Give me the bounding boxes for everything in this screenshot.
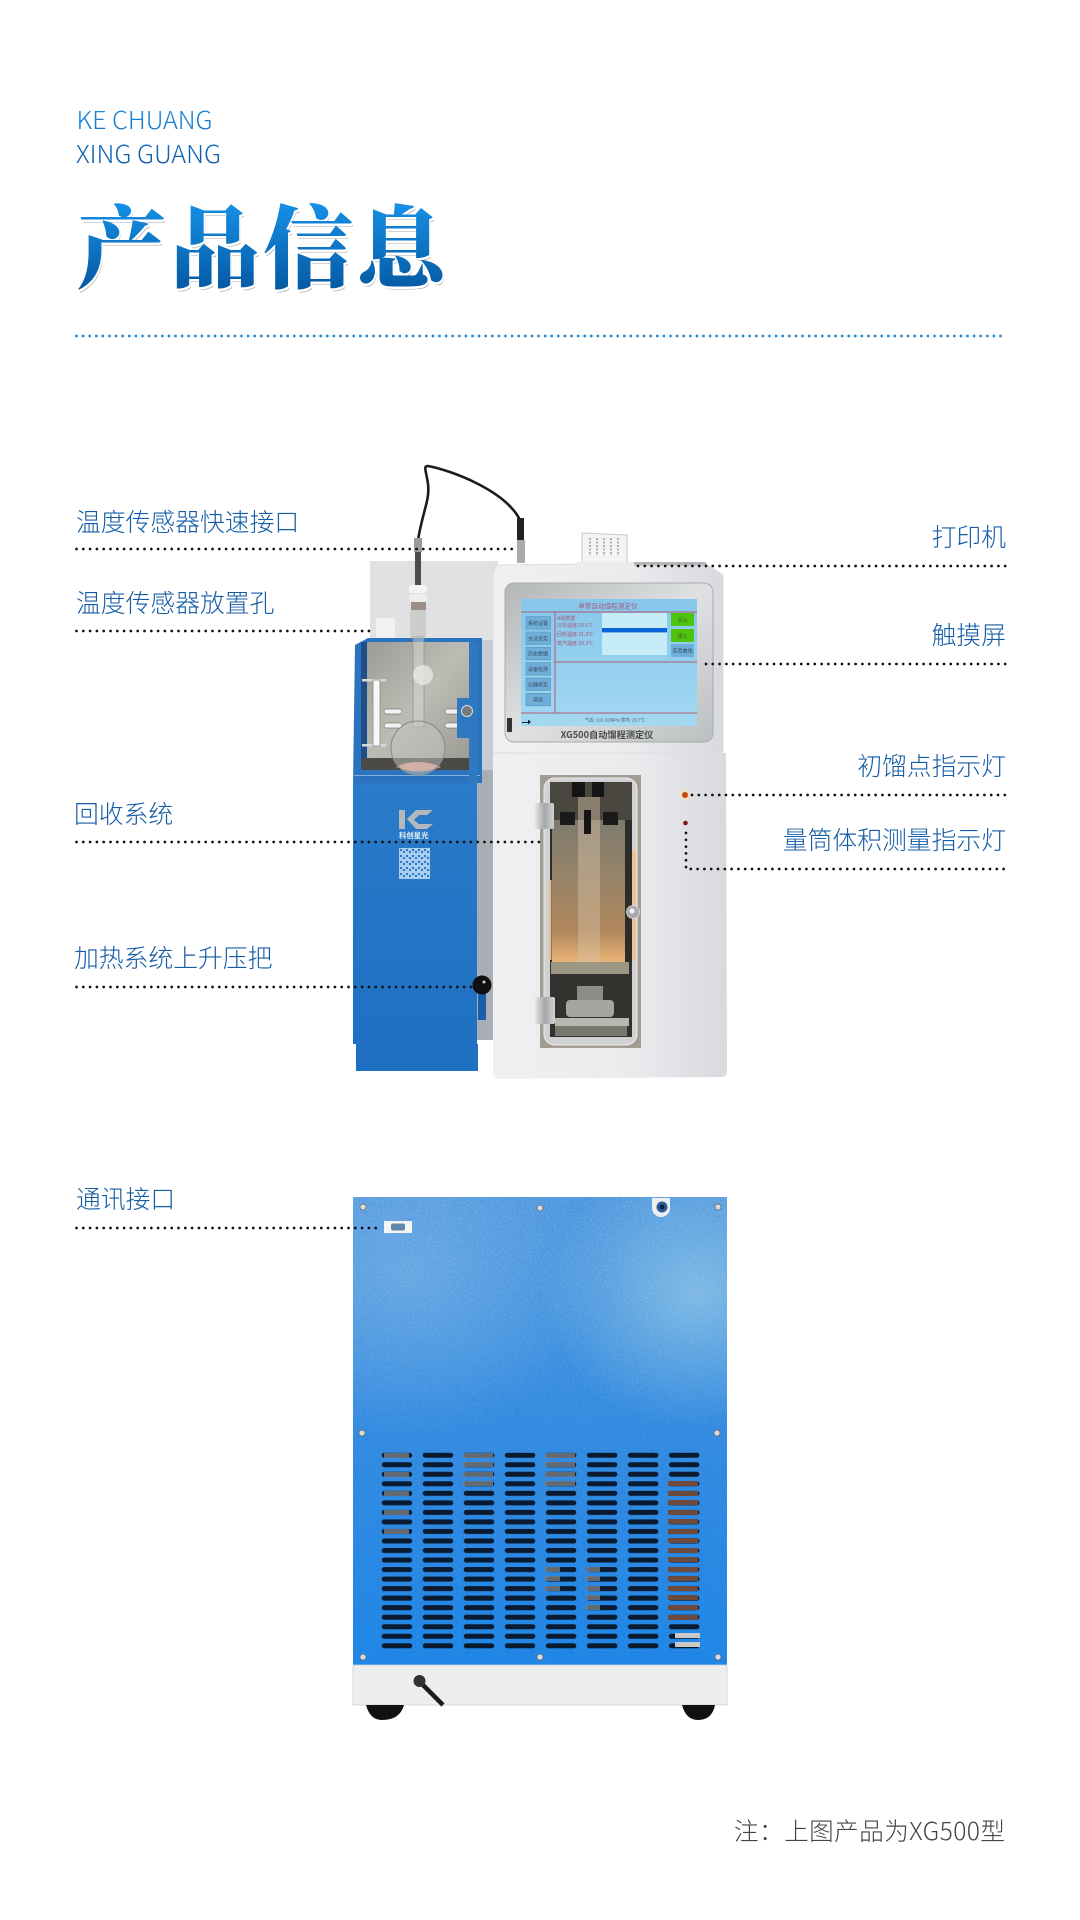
screen list bbox=[602, 613, 667, 655]
label: touch screen: 触摸屏 bbox=[932, 622, 1006, 650]
printer bbox=[575, 533, 706, 568]
sight glass bbox=[362, 679, 386, 682]
touch screen: 设备检测 bbox=[528, 666, 548, 673]
flask and stem bbox=[391, 538, 445, 775]
label: temperature sensor hole: 温度传感器放置孔 bbox=[76, 590, 274, 618]
hinges bbox=[535, 803, 554, 829]
temperature probe cable bbox=[418, 466, 520, 540]
label: recovery system: 回收系统 bbox=[74, 801, 173, 829]
label: heating lift handle: 加热系统上升压把 bbox=[74, 945, 272, 973]
indicator lights bbox=[680, 790, 690, 825]
recovery unit lower bbox=[353, 783, 492, 1071]
top mechanism bbox=[572, 782, 585, 797]
pressure handle bbox=[478, 990, 486, 1020]
side channel bbox=[482, 640, 495, 770]
title: 产品信息 bbox=[77, 202, 453, 300]
touch screen: 预入 bbox=[677, 633, 688, 640]
touch screen: 历史数据 bbox=[528, 651, 548, 658]
screen action buttons bbox=[671, 613, 694, 626]
screen readings: A组数据 bbox=[557, 615, 575, 622]
screen status bar: 气压: 101.325kPa 室内: 25.7℃ bbox=[585, 716, 646, 724]
copper back plate bbox=[552, 820, 625, 963]
sensor connector bbox=[517, 518, 525, 563]
label: initial boiling point light: 初馏点指示灯 bbox=[857, 753, 1006, 781]
touch screen: 仪器校定 bbox=[528, 681, 548, 688]
base mechanism bbox=[550, 962, 632, 1037]
header: brand line: KE CHUANG bbox=[76, 102, 212, 137]
main unit lower bbox=[493, 753, 727, 1079]
rear panel bbox=[353, 1197, 727, 1665]
graduated cylinder bbox=[578, 797, 600, 969]
header: brand line: XING GUANG bbox=[76, 136, 221, 171]
screen readings: 回收温度:21.9℃ bbox=[557, 631, 593, 638]
model name plate: XG500自动馏程测定仪 bbox=[561, 727, 653, 741]
touch screen: 系统设置 bbox=[528, 620, 548, 627]
power cable bbox=[414, 1675, 443, 1705]
QR code bbox=[399, 848, 430, 879]
USB slot bbox=[507, 718, 512, 732]
feet bbox=[366, 1705, 715, 1720]
footnote: 注：上图产品为XG500型 bbox=[734, 1812, 1005, 1848]
touch screen: 实验曲线 bbox=[672, 648, 693, 654]
product: front view bbox=[353, 466, 727, 1079]
main unit upper bbox=[493, 563, 723, 753]
title: 产品信息 bbox=[78, 203, 453, 302]
product: rear view bbox=[353, 1197, 727, 1720]
screen menu buttons bbox=[526, 617, 550, 706]
infographic canvas bbox=[74, 110, 1006, 1842]
screen readings: 冷却温度:28.1℃ bbox=[557, 622, 593, 629]
recovery unit upper bbox=[353, 638, 482, 783]
label: printer: 打印机 bbox=[932, 524, 1006, 552]
ventilation slots bbox=[382, 1453, 710, 1653]
header: brand line bbox=[76, 102, 221, 171]
touch screen: 方法设定 bbox=[528, 635, 548, 642]
label: temperature sensor quick connector: 温度传感器快速接口 bbox=[76, 509, 299, 537]
label: cylinder volume light: 量筒体积测量指示灯 bbox=[783, 827, 1006, 855]
door knob bbox=[626, 906, 640, 918]
screen readings bbox=[557, 615, 593, 647]
touch screen: 单管自动馏程测定仪 bbox=[578, 602, 638, 610]
touch screen: 灭火 bbox=[677, 618, 688, 624]
touch screen: 调试 bbox=[533, 697, 543, 704]
screen readings: 蒸汽温度:29.3℃ bbox=[557, 640, 593, 647]
header divider bbox=[76, 335, 1006, 337]
inspection door bbox=[535, 775, 641, 1048]
base plate bbox=[353, 1665, 727, 1705]
label: communication port: 通讯接口 bbox=[76, 1186, 175, 1214]
recovery unit lower: 科创星光 bbox=[399, 831, 429, 840]
back panel bbox=[370, 561, 498, 642]
logo bbox=[399, 810, 433, 829]
label: cylinder volume light bbox=[686, 827, 1006, 869]
title: 产品信息 bbox=[78, 204, 454, 304]
communication port bbox=[384, 1221, 412, 1233]
touch screen bbox=[521, 599, 697, 726]
panel screws bbox=[359, 1204, 721, 1660]
sensor placement hole cap bbox=[376, 618, 395, 638]
touch screen bezel bbox=[505, 583, 713, 742]
rear connector bbox=[652, 1198, 670, 1217]
